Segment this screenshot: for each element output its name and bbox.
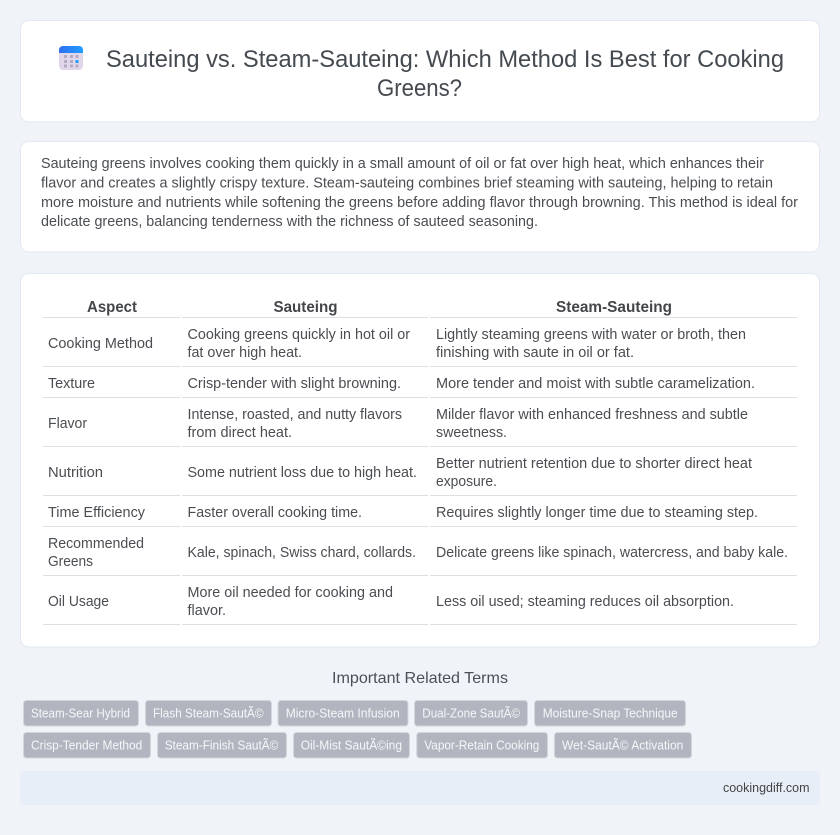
row: cooking method: Cooking Method (48, 336, 153, 352)
row: texture: Crisp-tender with slight browning. (188, 376, 401, 392)
row: texture (48, 376, 755, 392)
related terms chips: Moisture-Snap Technique (543, 706, 678, 720)
row: flavor: sweetness. (436, 425, 507, 441)
footer (20, 771, 820, 805)
row: nutrition: exposure. (436, 474, 497, 490)
row: cooking method: Cooking greens quickly in hot oil or (188, 327, 410, 343)
row: oil usage (48, 585, 734, 619)
row: flavor: Intense, roasted, and nutty flavors (188, 407, 402, 423)
row: flavor (48, 407, 748, 441)
panel: comparison table (20, 274, 820, 647)
text block: introduction paragraph: flavor and creates a slightly crispy texture. Steam-sauteing combines brief steaming with sauteing, helping to retain (41, 176, 773, 192)
row: cooking method: finishing with saute in oil or fat. (436, 345, 634, 361)
row: cooking method: fat over high heat. (188, 345, 302, 361)
text block: introduction paragraph: Sauteing greens involves cooking them quickly in a small amount of oil or fat over high heat, which enhances their (41, 156, 764, 172)
related terms chips: Micro-Steam Infusion (286, 706, 400, 720)
row: time efficiency: Faster overall cooking time. (188, 505, 362, 521)
row: time efficiency: Requires slightly longer time due to steaming step. (436, 505, 758, 521)
row: nutrition (48, 456, 752, 490)
row: flavor: Flavor (48, 416, 87, 432)
row: texture: More tender and moist with subtle caramelization. (436, 376, 755, 392)
row: oil usage: More oil needed for cooking and (188, 585, 393, 601)
row: recommended greens: Delicate greens like spinach, watercress, and baby kale. (436, 545, 788, 561)
panel: title card (20, 20, 820, 122)
text block: introduction paragraph: delicate greens, balancing tenderness with the richness of sauteed seasoning. (41, 214, 538, 230)
row: oil usage: flavor. (188, 603, 226, 619)
icon: calendar (59, 46, 83, 70)
panel: introduction (20, 142, 820, 252)
row: nutrition: Better nutrient retention due to shorter direct heat (436, 456, 752, 472)
heading: important related terms: Important Related Terms (332, 670, 508, 687)
related terms chips: Wet-SautÃ© Activation (562, 738, 683, 752)
row: cooking method (48, 327, 746, 361)
row: texture: Texture (48, 376, 95, 392)
row: recommended greens (48, 536, 788, 570)
row: recommended greens: Greens (48, 554, 93, 570)
related terms chips: Dual-Zone SautÃ© (422, 706, 521, 720)
title: Sauteing vs. Steam-Sauteing: Which Method Is Best for Cooking (106, 46, 784, 73)
title: Greens? (377, 75, 462, 102)
row: nutrition: Some nutrient loss due to high heat. (188, 465, 417, 481)
row: recommended greens: Recommended (48, 536, 144, 552)
table header row (87, 299, 672, 316)
row: time efficiency: Time Efficiency (48, 505, 146, 521)
related terms chips: Steam-Finish SautÃ© (165, 738, 279, 752)
related terms chips: Crisp-Tender Method (31, 738, 142, 752)
row: recommended greens: Kale, spinach, Swiss chard, collards. (188, 545, 416, 561)
row: nutrition: Nutrition (48, 465, 103, 481)
text block: introduction paragraph (41, 156, 798, 230)
row: flavor: Milder flavor with enhanced freshness and subtle (436, 407, 748, 423)
text block: introduction paragraph: more moisture and nutrients while softening the greens before adding flavor through browning. This method is ideal for (41, 195, 798, 211)
related terms chips: Vapor-Retain Cooking (424, 738, 539, 752)
table header row: Sauteing (274, 299, 338, 316)
footer: cookingdiff.com (723, 781, 810, 795)
related terms chips (24, 700, 692, 758)
related terms chips: Oil-Mist SautÃ©ing (301, 738, 402, 752)
table header row: Aspect (87, 299, 137, 316)
title (106, 46, 784, 102)
row: time efficiency (48, 505, 758, 521)
related terms chips: Flash Steam-SautÃ© (153, 706, 264, 720)
row: oil usage: Less oil used; steaming reduces oil absorption. (436, 594, 734, 610)
related terms chips: Steam-Sear Hybrid (31, 706, 130, 720)
row: oil usage: Oil Usage (48, 594, 109, 610)
row: flavor: from direct heat. (188, 425, 292, 441)
row: cooking method: Lightly steaming greens with water or broth, then (436, 327, 746, 343)
table header row: Steam-Sauteing (556, 299, 672, 316)
